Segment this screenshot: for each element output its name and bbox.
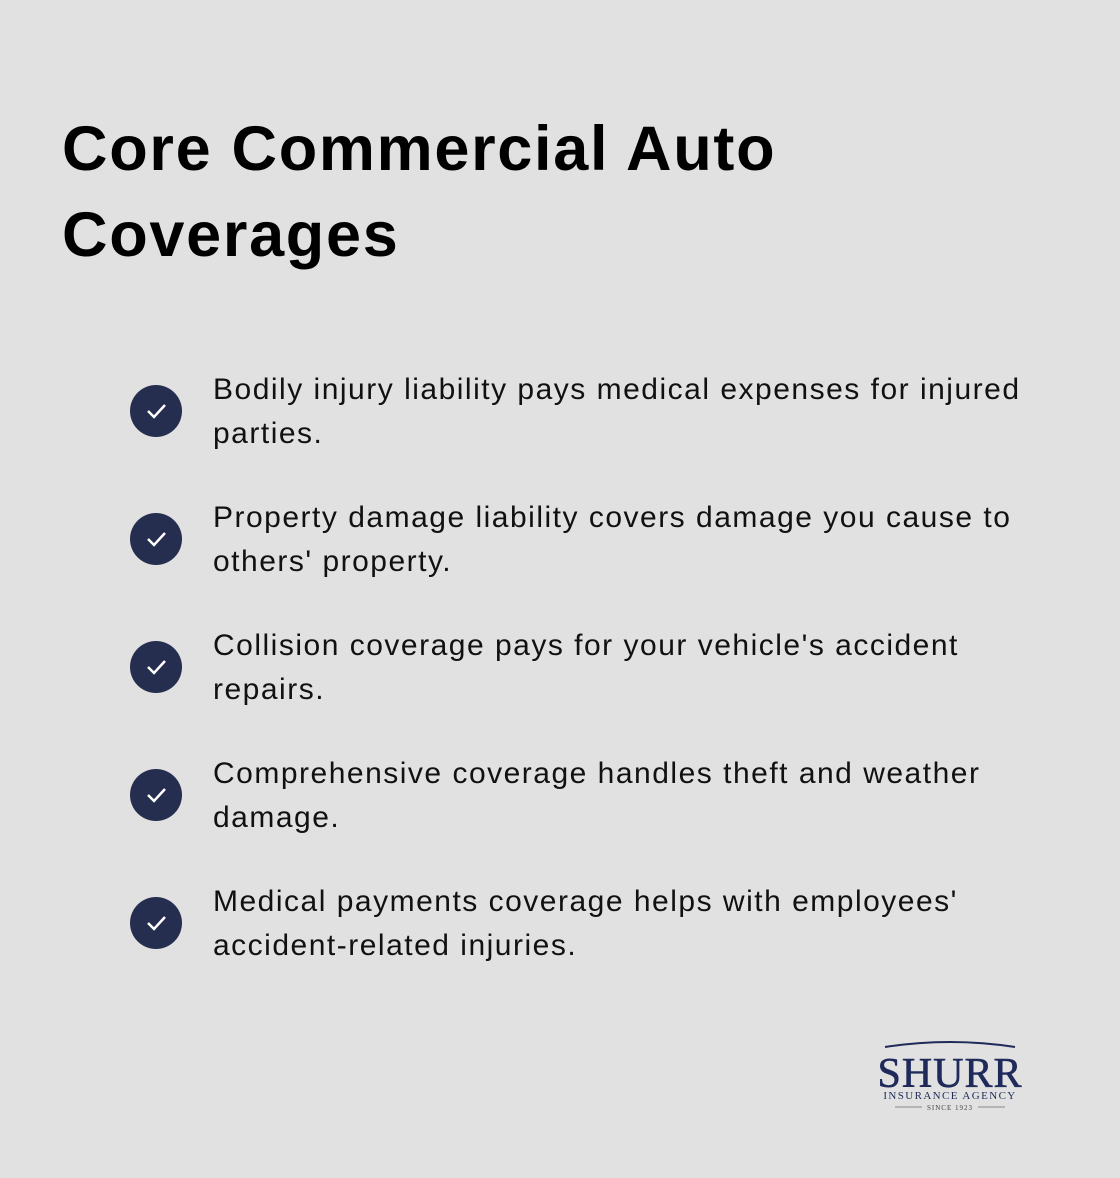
logo: SHURR xyxy=(877,1051,1023,1097)
icon: check xyxy=(130,769,182,821)
logo: SINCE 1923 xyxy=(927,1104,973,1112)
text 4: Comprehensive coverage handles theft and weather xyxy=(213,757,980,790)
text 4 xyxy=(213,757,980,834)
item 5 xyxy=(130,885,958,962)
text 2 xyxy=(213,501,1011,578)
item 2 xyxy=(130,501,1011,578)
text 4: damage. xyxy=(213,801,340,834)
logo: INSURANCE AGENCY xyxy=(883,1090,1017,1102)
text 5: Medical payments coverage helps with employees' xyxy=(213,885,958,918)
item 3 xyxy=(130,629,959,706)
text 2: Property damage liability covers damage you cause to xyxy=(213,501,1011,534)
title: Core Commercial Auto xyxy=(62,114,776,184)
icon: check xyxy=(130,897,182,949)
text 1: parties. xyxy=(213,417,323,450)
item 1 xyxy=(130,373,1021,450)
text 3 xyxy=(213,629,959,706)
text 5 xyxy=(213,885,958,962)
text 1: Bodily injury liability pays medical expenses for injured xyxy=(213,373,1021,406)
icon: check xyxy=(130,385,182,437)
logo xyxy=(877,1041,1023,1112)
text 3: repairs. xyxy=(213,673,325,706)
title xyxy=(62,114,776,270)
icon: check xyxy=(130,641,182,693)
text 2: others' property. xyxy=(213,545,452,578)
item 4 xyxy=(130,757,980,834)
text 3: Collision coverage pays for your vehicle's accident xyxy=(213,629,959,662)
icon: check xyxy=(130,513,182,565)
text 5: accident-related injuries. xyxy=(213,929,577,962)
title: Coverages xyxy=(62,200,399,270)
text 1 xyxy=(213,373,1021,450)
